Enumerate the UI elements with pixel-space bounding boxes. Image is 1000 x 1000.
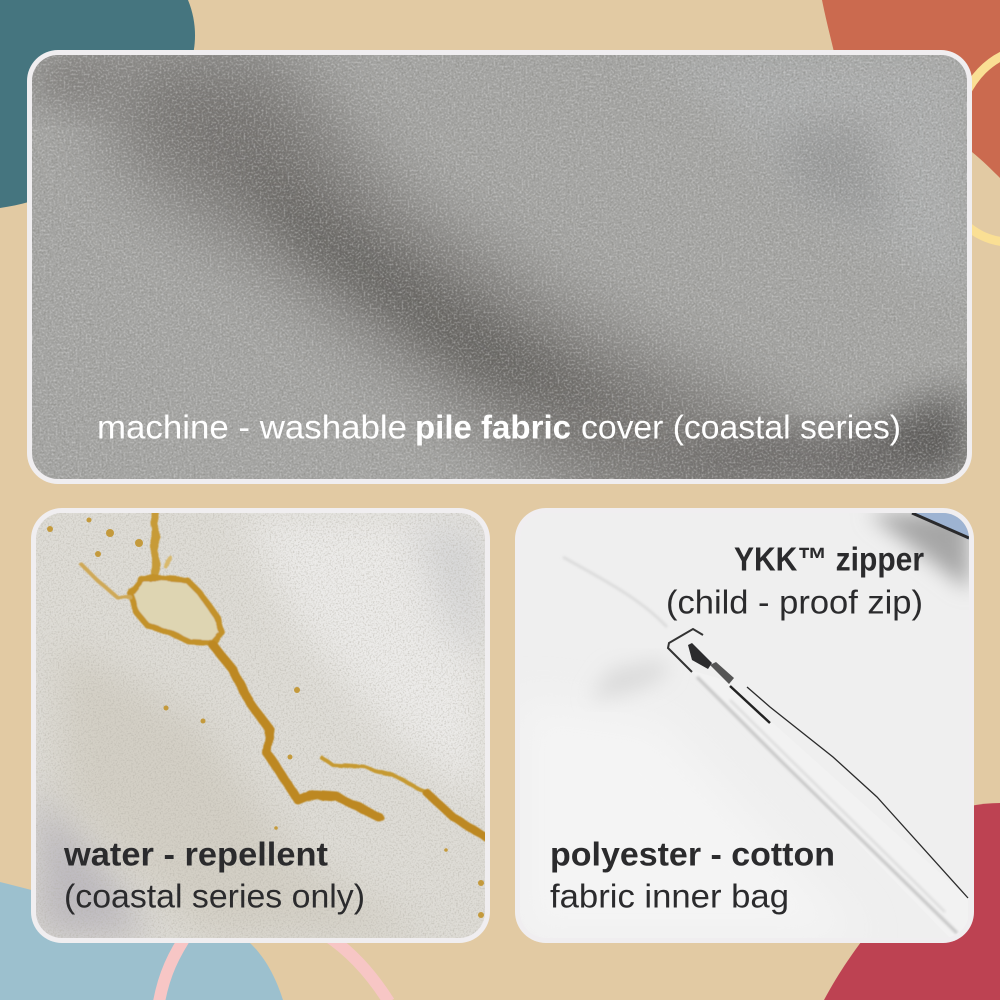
caption: water repellent [63,836,365,914]
illustration: honey droplets [47,518,484,918]
caption: polyester cotton inner bag [550,836,835,914]
caption: machine-washable pile fabric: machine - washable [97,408,407,446]
illustration: zipper stitch line [747,687,968,898]
panel: inner bag and zipper [515,508,974,943]
decor: orange blob top right [822,0,1000,178]
caption: water repellent: (coastal series only) [64,878,365,914]
illustration: zipper pull [668,629,734,684]
caption: YKK zipper [666,540,924,620]
photo: white inner bag [563,513,969,934]
photo: grey pile fabric [32,50,967,500]
caption: polyester cotton inner bag: polyester - cotton [550,836,835,872]
illustration: honey streams [80,513,490,840]
illustration: fabric fold [563,557,667,627]
panel: water repellent [31,508,490,943]
photo: honey on fabric [36,513,490,938]
decor: red blob bottom right [824,803,1000,1000]
decor: light blue blob bottom left [0,882,283,1000]
caption: YKK zipper: (child - proof zip) [666,584,923,620]
illustration: zipper strip [690,670,968,938]
decor: pink ring bottom [159,930,389,1000]
caption: machine-washable pile fabric: cover (coastal series) [581,408,901,446]
caption: machine-washable pile fabric: pile fabric [415,408,571,446]
illustration: blue corner object [915,513,969,540]
caption: polyester cotton inner bag: fabric inner bag [550,878,789,914]
panel: pile fabric cover [27,50,972,500]
decor: yellow ring top right [965,54,1000,242]
caption: water repellent: water - repellent [63,836,328,872]
caption: YKK zipper: YKK™ zipper [734,540,924,578]
caption: machine-washable pile fabric [97,408,901,446]
decor: teal blob top left [0,0,195,208]
